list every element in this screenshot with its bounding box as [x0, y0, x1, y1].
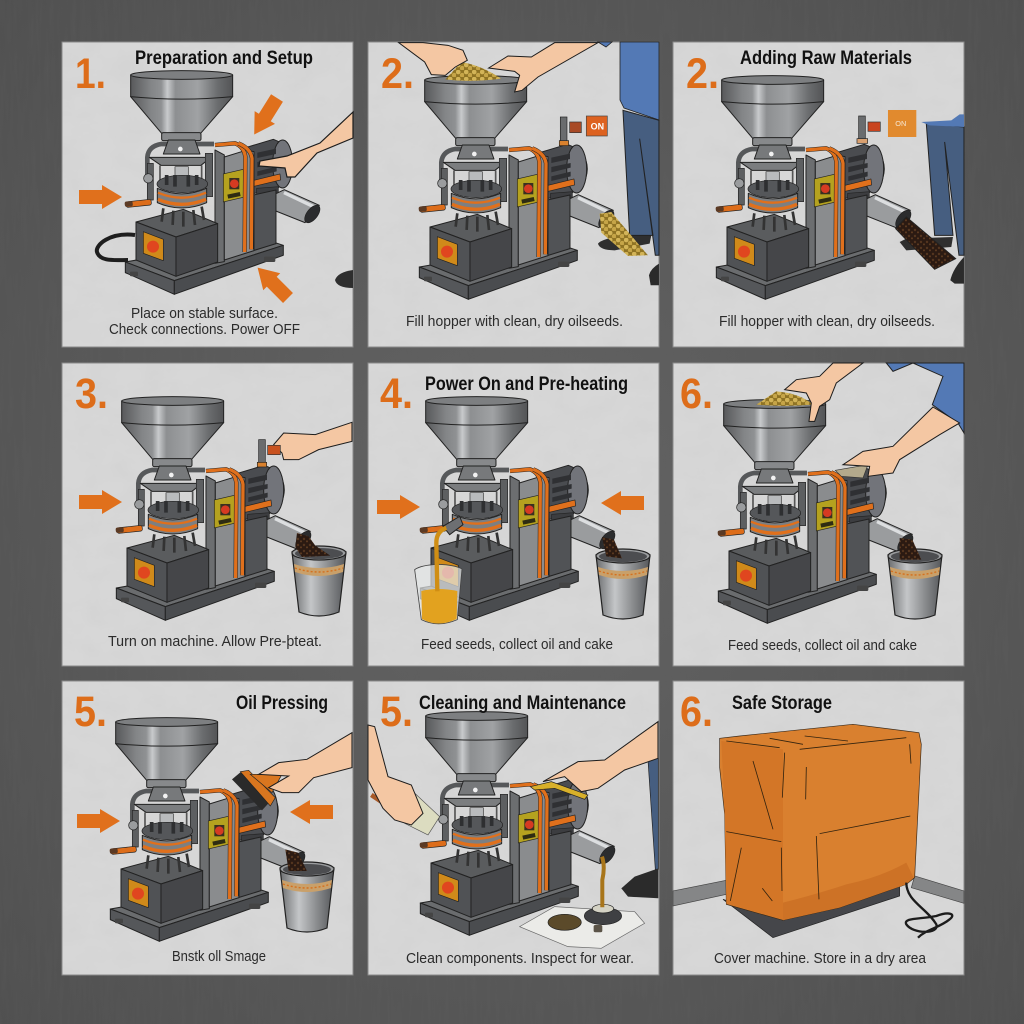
arrow: top — [244, 92, 287, 141]
bucket — [280, 862, 334, 932]
bucket — [596, 549, 650, 619]
overlay brush and hand — [232, 733, 352, 871]
body text: Turn on machine. Allow Pre-þteat. — [108, 634, 322, 650]
bucket — [888, 549, 942, 619]
machine — [115, 397, 314, 620]
hand pointing — [259, 112, 353, 177]
panel: step 1 preparation and setup — [62, 42, 353, 347]
floor lines — [673, 876, 964, 906]
yellow cloth — [530, 782, 588, 799]
overlay hands, cloth and oil — [368, 722, 658, 948]
panel: step 6 feed seeds — [673, 363, 964, 666]
right hand — [543, 722, 658, 792]
machine base — [723, 885, 900, 938]
falling cake — [295, 533, 330, 557]
overlay hand and cake — [257, 422, 352, 557]
arrow: left — [377, 495, 420, 519]
rag handle — [371, 795, 391, 808]
arrow: left — [77, 809, 120, 833]
heading: Adding Raw Materials — [740, 48, 912, 69]
body text: Feed seeds, collect oil and cake — [728, 638, 917, 654]
body text: Feed seeds, collect oil and cake — [421, 637, 613, 653]
overlay hands and seeds — [756, 363, 964, 560]
switch — [268, 445, 280, 455]
overlay beaker and oil — [415, 516, 622, 624]
machine — [419, 712, 618, 935]
panel: step 5 cleaning and maintenance — [368, 681, 659, 975]
rag — [405, 790, 440, 835]
bristles — [232, 771, 274, 810]
machine — [418, 76, 617, 299]
step number: 2. — [381, 50, 414, 98]
heading: Oil Pressing — [236, 693, 328, 714]
falling cake — [602, 537, 622, 558]
tray of seeds — [835, 465, 868, 478]
on switch — [559, 116, 607, 146]
left hand — [399, 43, 467, 75]
person legs and shoes — [598, 110, 659, 285]
person — [900, 114, 964, 284]
heading: Cleaning and Maintenance — [419, 693, 626, 714]
body text: Fill hopper with clean, dry oilseeds. — [406, 314, 623, 330]
lower arm — [843, 407, 960, 476]
seeds in hopper — [756, 391, 813, 406]
body text — [109, 306, 300, 338]
right hand — [489, 43, 598, 92]
brush handle — [250, 774, 282, 793]
power cord — [97, 235, 135, 260]
step number: 1. — [75, 50, 106, 98]
covered machine — [673, 724, 964, 938]
step number: 2. — [686, 50, 719, 98]
step number: 5. — [74, 688, 107, 736]
arrow: right — [601, 491, 644, 515]
panel: step 2 fill hopper — [368, 42, 659, 347]
hand — [259, 733, 352, 793]
body text: Fill hopper with clean, dry oilseeds. — [719, 314, 935, 330]
beaker — [415, 564, 462, 624]
overlay hands and seeds — [399, 43, 648, 256]
panel: step 2 adding raw materials — [673, 42, 964, 347]
heading: Preparation and Setup — [135, 48, 313, 69]
body text: Clean components. Inspect for wear. — [406, 951, 634, 967]
person leg and shoe — [621, 758, 658, 898]
machine — [419, 397, 618, 620]
hand on switch — [274, 422, 352, 460]
shirt — [598, 42, 659, 120]
heading: Safe Storage — [732, 693, 832, 714]
heading: Power On and Pre-heating — [425, 374, 628, 395]
seeds in hopper — [445, 62, 501, 81]
on switch: ON — [895, 119, 906, 128]
step number: 4. — [380, 370, 413, 418]
step number: 6. — [680, 370, 713, 418]
machine — [715, 76, 914, 299]
power lever — [257, 440, 267, 467]
panel: step 4 power on and pre-heating — [368, 363, 659, 666]
oil outlet — [443, 516, 463, 535]
shirt — [886, 363, 964, 433]
body text: Check connections. Power OFF — [109, 322, 300, 338]
arrow — [79, 490, 122, 514]
arrow: bottom — [249, 259, 296, 306]
machine — [124, 71, 323, 294]
step number: 3. — [75, 370, 108, 418]
on switch — [857, 110, 916, 143]
oil stream — [602, 857, 604, 907]
body text: Bnstk oll Smage — [172, 949, 266, 965]
arrow: left — [79, 185, 122, 209]
machine — [109, 718, 308, 941]
overlay tray and switch — [857, 110, 956, 269]
cake tray — [896, 217, 956, 269]
cord — [906, 883, 952, 938]
orange cover — [720, 724, 921, 920]
brush back — [240, 770, 275, 806]
shoe — [335, 270, 353, 288]
step number: 5. — [380, 688, 413, 736]
upper hand — [785, 363, 863, 421]
on switch: ON — [591, 121, 604, 131]
falling seeds — [600, 212, 648, 256]
arrow: right — [290, 800, 333, 824]
falling cake — [285, 849, 307, 871]
panel: step 3 turn on machine — [62, 363, 353, 666]
body text: Cover machine. Store in a dry area — [714, 951, 927, 967]
panel: step 6 safe storage — [673, 681, 964, 975]
cloth with parts — [520, 904, 645, 948]
left hand — [368, 725, 423, 825]
bucket — [292, 546, 346, 616]
step number: 6. — [680, 688, 713, 736]
oil stream — [436, 528, 446, 591]
falling cake — [900, 538, 921, 560]
panel: step 5 oil pressing — [62, 681, 353, 975]
machine — [717, 400, 916, 623]
body text: Place on stable surface. — [131, 306, 278, 322]
